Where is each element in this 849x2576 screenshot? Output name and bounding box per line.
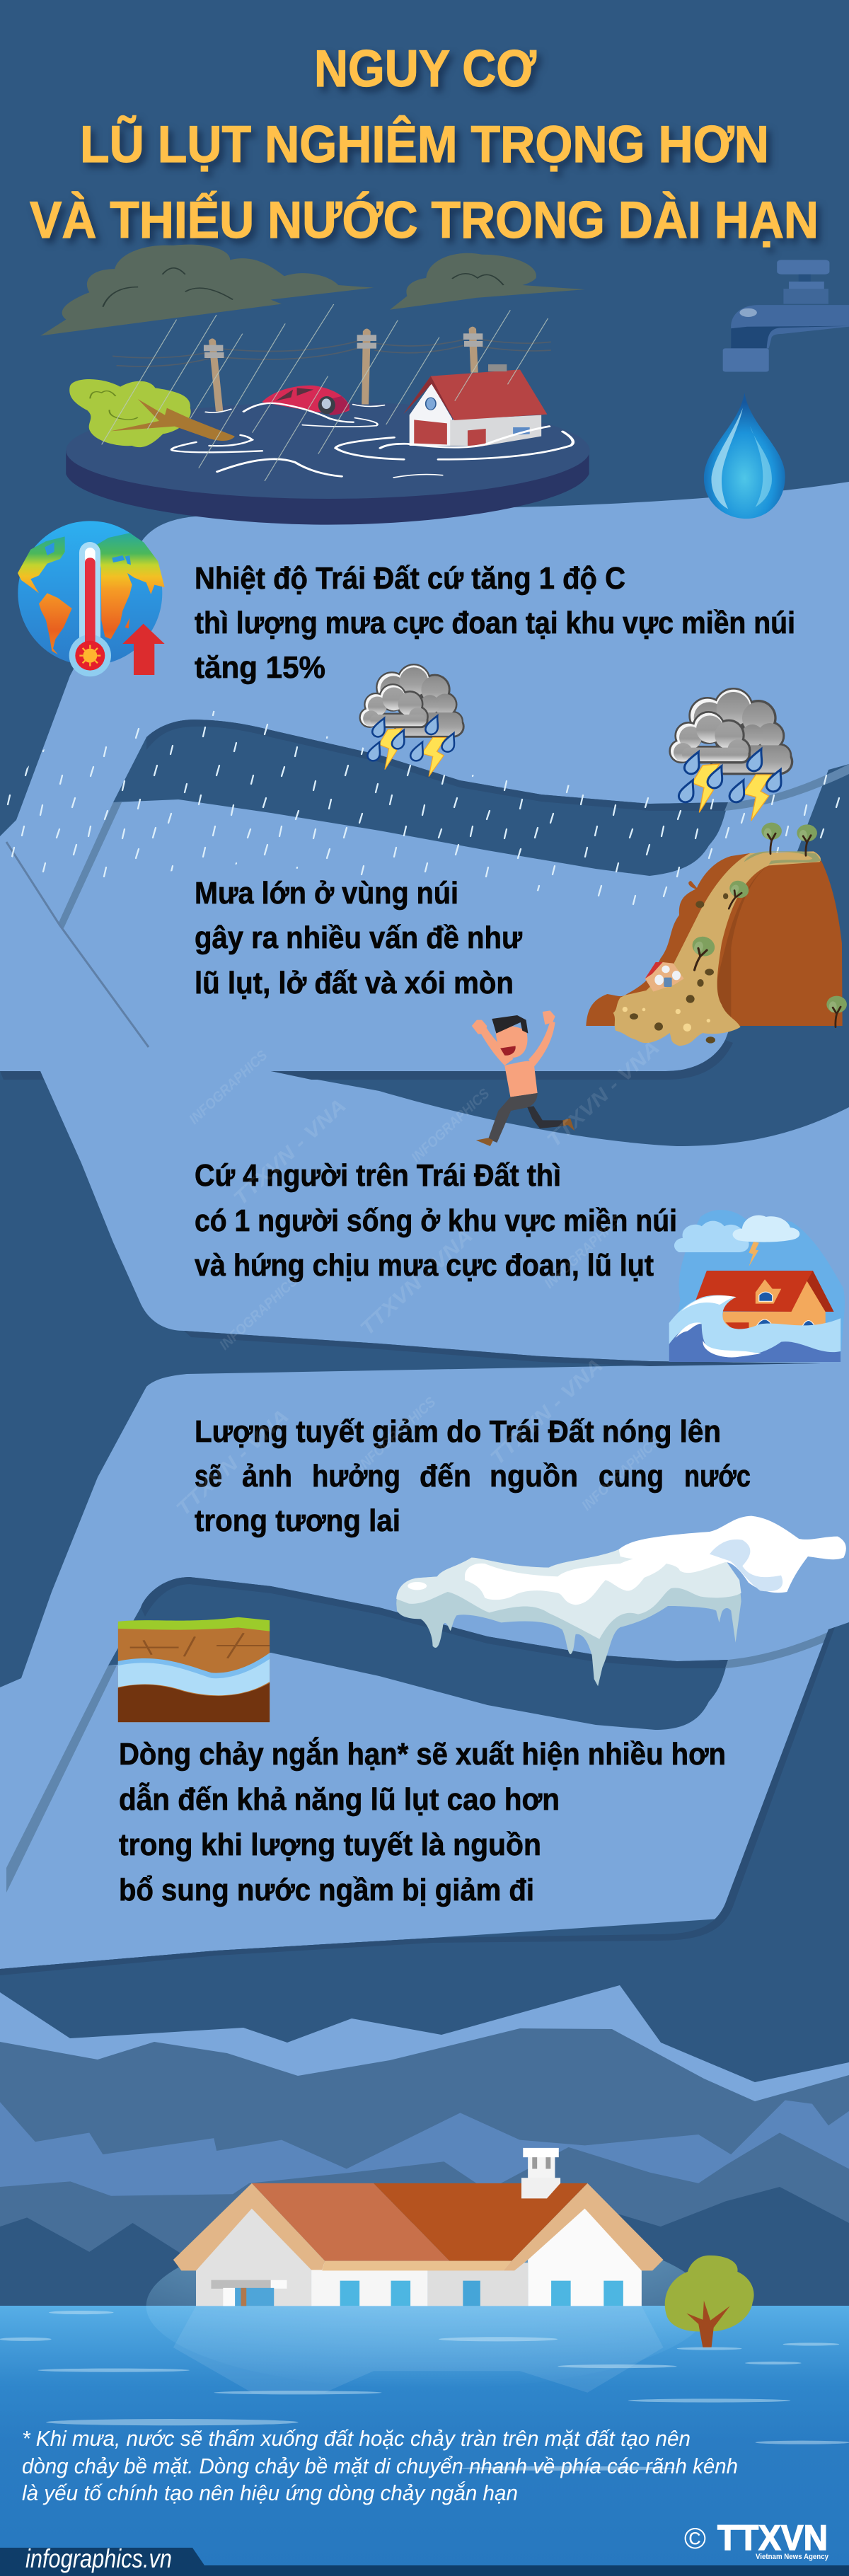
icon: birds on cloud	[103, 268, 504, 307]
icon: thermometer	[69, 542, 111, 676]
house	[403, 364, 547, 446]
text block: temperature: tăng 15%	[195, 650, 325, 685]
flood house sky	[670, 1210, 845, 1362]
platform top	[66, 402, 590, 499]
panel: left dark notch	[0, 1071, 821, 1687]
tree trunk	[110, 399, 235, 441]
grass edge	[744, 851, 821, 865]
watermarks: TTXVN - VNA	[356, 1225, 477, 1339]
wave crest	[681, 1295, 737, 1311]
water ripples	[0, 2311, 849, 2471]
roof light	[252, 2183, 449, 2261]
text block: people: Cứ 4 người trên Trái Đất thì	[195, 1158, 561, 1193]
panel: light blue winding background	[0, 482, 849, 2335]
text block: snow	[195, 1414, 751, 1538]
text block: snow: hưởng	[312, 1459, 400, 1494]
icon: globe inland seas	[45, 543, 131, 565]
watermarks: INFOGRAPHICS	[216, 1273, 301, 1353]
watermarks	[172, 1036, 664, 1520]
footnote: là yếu tố chính tạo nên hiệu ứng dòng chảy ngắn hạn	[22, 2480, 518, 2505]
text block: heavy rain: lũ lụt, lở đất và xói mòn	[195, 966, 514, 1000]
watermarks: INFOGRAPHICS	[354, 1394, 439, 1474]
tree	[665, 2256, 754, 2347]
tree squiggles	[90, 391, 138, 420]
text block: snow: đến	[420, 1459, 471, 1494]
watermarks: INFOGRAPHICS	[541, 1211, 626, 1292]
man hands	[472, 1010, 555, 1034]
tree three	[721, 877, 751, 913]
centre wall shade	[428, 2263, 528, 2306]
watermarks: TTXVN - VNA	[172, 1405, 293, 1520]
text block: heavy rain	[195, 876, 522, 1000]
footnote	[22, 2426, 738, 2505]
snow base and icicles	[396, 1549, 741, 1686]
water layer	[118, 1655, 270, 1695]
soil cracks	[130, 1633, 270, 1658]
soil grass	[118, 1617, 270, 1631]
man shoes	[476, 1119, 574, 1146]
man mouth	[500, 1046, 516, 1056]
logo: TTXVN	[684, 2518, 829, 2561]
text block: snow: ảnh	[242, 1459, 292, 1494]
dark wave	[669, 1324, 841, 1362]
text block: runoff: Dòng chảy ngắn hạn* sẽ xuất hiện nhiều hơn	[119, 1736, 726, 1772]
door red	[726, 1322, 749, 1330]
watermarks: TTXVN - VNA	[229, 1094, 350, 1209]
pole three	[463, 327, 483, 373]
right wing wall	[528, 2205, 642, 2306]
footnote: dòng chảy bề mặt. Dòng chảy bề mặt di chuyển nhanh về phía các rãnh kênh	[22, 2454, 738, 2478]
text block: snow: cung	[599, 1459, 664, 1494]
logo: TTXVN: Vietnam News Agency	[756, 2553, 829, 2561]
snow upper right	[619, 1516, 846, 1593]
panel: mountain range	[0, 1985, 849, 2335]
illustration: running man	[472, 1010, 574, 1146]
water glow	[146, 2223, 710, 2389]
mountain layer three	[0, 2101, 849, 2309]
panel: wedge shadow	[271, 1040, 733, 1080]
roof dark	[374, 2183, 587, 2261]
panel: band two rim	[141, 1577, 728, 1668]
watermarks: TTXVN - VNA	[543, 1036, 664, 1151]
panel: band two pale stripe	[6, 1622, 849, 1893]
illustration: flooded island	[66, 304, 590, 525]
watermarks: INFOGRAPHICS	[408, 1085, 493, 1166]
dormer window	[756, 1279, 781, 1304]
water layer edge	[118, 1653, 270, 1678]
text block: heavy rain: Mưa lớn ở vùng núi	[195, 876, 458, 911]
panel: wavy dark band one	[113, 720, 731, 876]
flood house roof	[691, 1271, 834, 1312]
platform side	[66, 451, 589, 525]
text block: heavy rain: gây ra nhiều vấn đề như	[195, 920, 522, 955]
man right leg	[527, 1106, 564, 1128]
pole one	[204, 338, 224, 412]
panel: band one rim	[146, 720, 731, 811]
diagonal rain lines	[102, 304, 548, 481]
icon: storm cloud two	[671, 690, 792, 821]
dormer glass	[759, 1292, 773, 1301]
text block: snow: Lượng tuyết giảm do Trái Đất nóng lên	[195, 1414, 721, 1449]
title line two: LŨ LỤT NGHIÊM TRỌNG HƠN	[80, 116, 769, 173]
flood house cloud two	[733, 1215, 799, 1242]
panel: fold line	[6, 842, 149, 1047]
man left leg	[488, 1093, 538, 1143]
rain streaks	[0, 707, 849, 913]
house reflection	[173, 2306, 663, 2393]
text block: snow: trong tương lai	[195, 1503, 400, 1538]
chimney	[521, 2148, 560, 2198]
mountain	[586, 853, 843, 1026]
pole two	[357, 328, 376, 405]
tree five	[826, 996, 847, 1027]
text block: temperature	[195, 561, 795, 685]
text block: people: và hứng chịu mưa cực đoan, lũ lụt	[195, 1248, 654, 1283]
icon: storm clouds	[40, 245, 585, 335]
text block: people	[195, 1158, 677, 1283]
watermarks: INFOGRAPHICS	[579, 1433, 664, 1514]
text block: snow: nguồn	[490, 1459, 578, 1494]
tree foliage	[69, 379, 191, 447]
roof side	[807, 1271, 834, 1312]
source bar	[0, 2548, 849, 2576]
panel: band one pale stripe	[58, 764, 849, 928]
tree two	[797, 824, 817, 855]
mountain layer two	[0, 2028, 849, 2335]
mountain shade	[715, 865, 769, 1026]
tree four	[685, 934, 717, 974]
title	[30, 40, 819, 249]
wires	[112, 340, 551, 366]
icon: storm cloud one	[361, 665, 463, 777]
man hair	[492, 1015, 528, 1034]
left wing wall	[196, 2205, 311, 2306]
icon: globe continents	[18, 533, 165, 654]
flood house cloud one	[674, 1221, 749, 1252]
lightning	[749, 1242, 759, 1266]
mountain layer four	[0, 2132, 849, 2309]
footnote: * Khi mưa, nước sẽ thấm xuống đất hoặc chảy tràn trên mặt đất tạo nên	[22, 2426, 691, 2451]
roof trim right	[504, 2183, 663, 2270]
windows	[340, 2281, 623, 2306]
icon: red arrow up	[122, 624, 165, 675]
watermarks: INFOGRAPHICS	[186, 1047, 271, 1128]
pebbles	[623, 1007, 710, 1032]
panel: lower dark rim	[0, 1627, 835, 1975]
text block: snow: sẽ	[195, 1459, 222, 1494]
text block: temperature: Nhiệt độ Trái Đất cứ tăng 1 độ C	[195, 561, 625, 596]
text block: runoff: bổ sung nước ngầm bị giảm đi	[119, 1873, 534, 1907]
roof trim left	[173, 2183, 325, 2270]
snow shade	[710, 1540, 782, 1591]
small tilted house	[645, 962, 684, 992]
wave foam	[675, 1322, 761, 1357]
icon: small cloud	[390, 253, 585, 310]
icon: water faucet	[704, 260, 849, 519]
panel: left notch shadow	[0, 1071, 821, 1366]
car	[262, 386, 350, 415]
title: NGUY CƠ	[314, 40, 537, 98]
man torso	[504, 1061, 538, 1097]
illustration: landslide	[586, 823, 847, 1046]
water surface	[0, 2306, 849, 2576]
text block: runoff: dẫn đến khả năng lũ lụt cao hơn	[119, 1781, 560, 1817]
icon: water drop	[704, 393, 785, 519]
man arms	[479, 1021, 555, 1067]
snow highlight	[408, 1582, 427, 1590]
illustration: house in flood	[669, 1210, 845, 1362]
earth slide	[613, 851, 821, 1046]
text block: temperature: thì lượng mưa cực đoan tại khu vực miền núi	[195, 606, 795, 640]
illustration: snow and icicles	[396, 1516, 846, 1686]
porch	[211, 2280, 287, 2306]
logo: TTXVN: TTXVN	[717, 2518, 828, 2558]
deep earth	[118, 1683, 270, 1722]
text block: people: có 1 người sống ở khu vực miền núi	[195, 1203, 677, 1238]
icon: globe with thermometer	[18, 521, 165, 676]
rocks	[630, 893, 728, 1044]
panel: wavy dark band two	[108, 1577, 728, 1730]
text block: runoff	[119, 1736, 726, 1907]
panel: right edge dark wedge	[271, 764, 849, 1146]
wall windows	[756, 1319, 816, 1329]
water ripples	[172, 403, 573, 478]
logo: TTXVN: ©	[684, 2522, 706, 2555]
snow middle	[396, 1549, 741, 1639]
mountain layer five	[0, 2187, 849, 2309]
watermarks: TTXVN - VNA	[486, 1354, 607, 1469]
source url: infographics.vn	[25, 2544, 172, 2573]
hillside tree one	[761, 823, 782, 854]
light wave	[669, 1295, 841, 1362]
illustration: flooded house	[0, 2148, 849, 2471]
centre wall	[311, 2263, 428, 2306]
snow top	[465, 1556, 668, 1605]
panel: lower dark region	[0, 1622, 849, 2335]
text block: snow: nước	[684, 1459, 751, 1494]
flood house walls	[722, 1281, 826, 1332]
roof trim front	[322, 2261, 512, 2270]
man head	[496, 1026, 528, 1058]
icon: soil layers	[118, 1617, 270, 1722]
text block: runoff: trong khi lượng tuyết là nguồn	[119, 1827, 541, 1862]
